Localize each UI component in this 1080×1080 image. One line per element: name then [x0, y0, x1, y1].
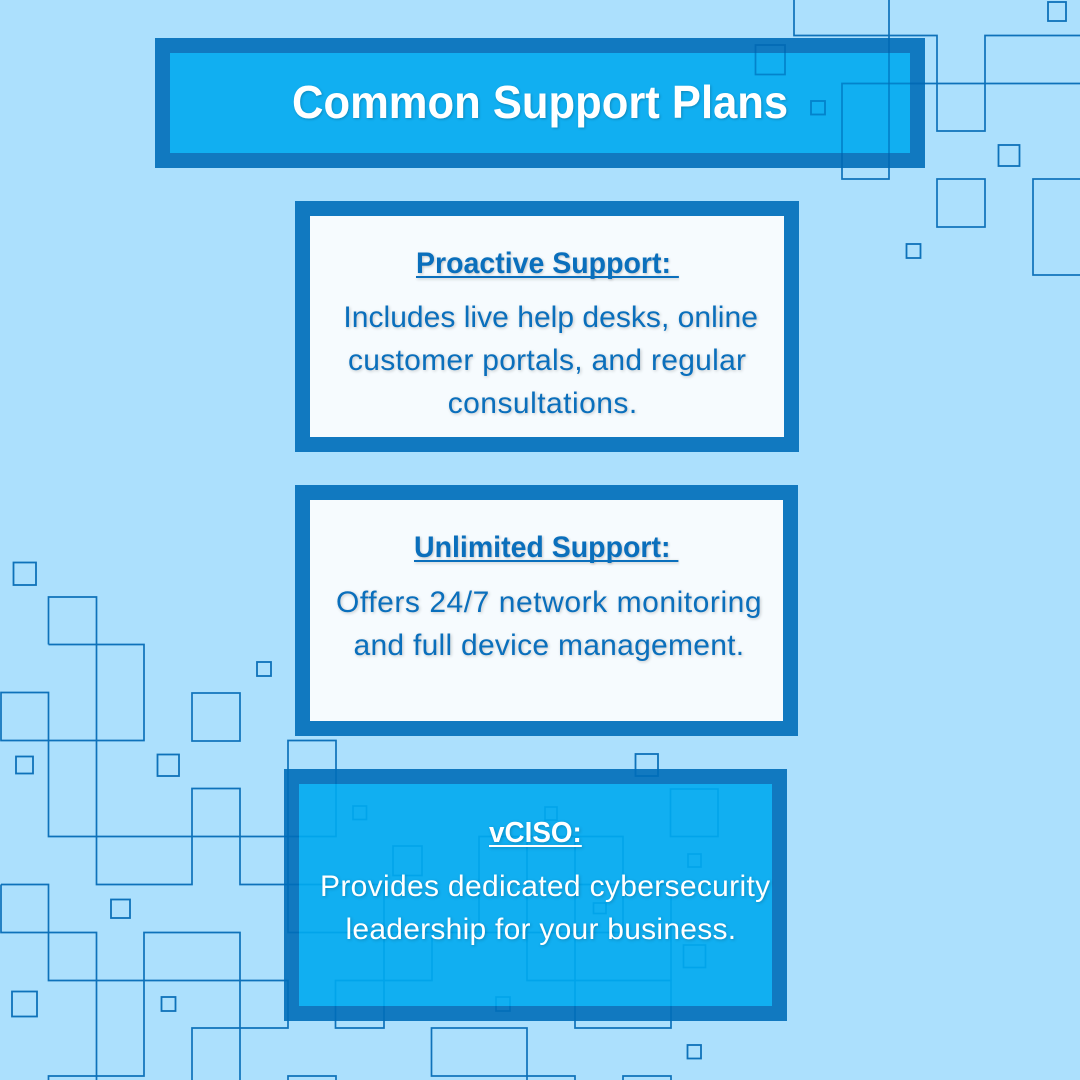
panel: title banner — [155, 38, 925, 168]
text: vCISO description: leadership for your business. — [346, 913, 736, 946]
text: unlimited support description — [336, 586, 762, 664]
text: unlimited support description: and full device management. — [354, 629, 744, 662]
heading: proactive support: Proactive Support: — [416, 247, 670, 280]
text: proactive support description: Includes live help desks, online — [343, 301, 758, 334]
text: proactive support description — [343, 301, 759, 420]
heading: unlimited support: Unlimited Support: — [414, 531, 670, 564]
heading: vCISO: vCISO: — [489, 817, 582, 849]
panel: vCISO — [284, 769, 787, 1021]
panel: proactive support — [295, 201, 798, 452]
text: vCISO description: Provides dedicated cybersecurity — [320, 870, 770, 903]
text: proactive support description: consultations. — [448, 387, 638, 420]
text: vCISO description — [320, 870, 772, 948]
text: unlimited support description: Offers 24/7 network monitoring — [336, 586, 762, 619]
title: Common Support Plans — [292, 76, 788, 128]
text: proactive support description: customer portals, and regular — [348, 344, 746, 377]
panel: unlimited support — [294, 485, 798, 736]
